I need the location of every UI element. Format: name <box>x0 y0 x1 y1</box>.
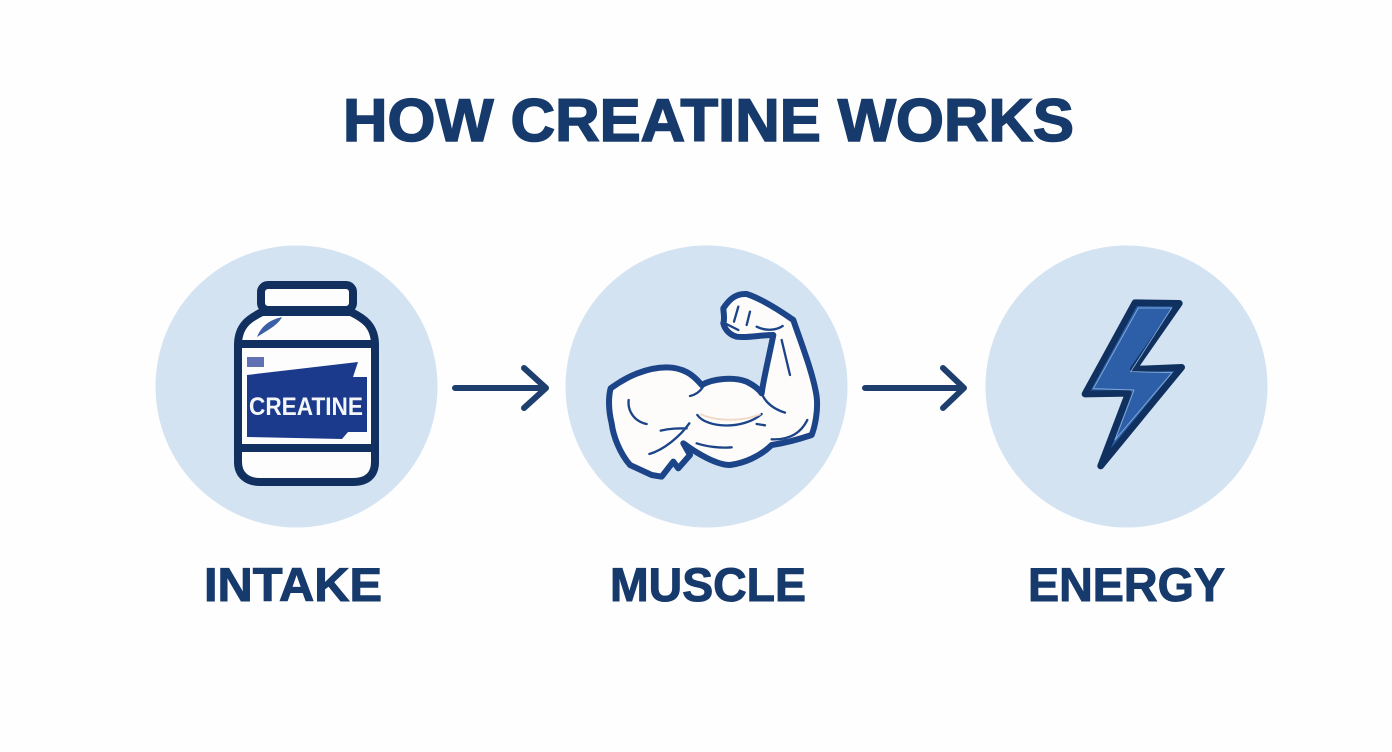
bottle label text: CREATINE <box>249 393 363 421</box>
icon: lightning bolt <box>1085 303 1182 466</box>
label panel <box>247 362 367 439</box>
muscle contour lines <box>629 307 807 454</box>
panel: intake <box>156 246 438 611</box>
arrow: intake to muscle <box>455 368 546 408</box>
arrow: muscle to energy <box>865 368 964 408</box>
bolt shape <box>1085 303 1182 466</box>
panel: muscle <box>566 246 848 611</box>
intake label: INTAKE <box>204 558 382 611</box>
muscle circle <box>566 246 848 528</box>
intake circle <box>156 246 438 528</box>
arm outline <box>609 294 817 477</box>
bottle cap <box>261 285 353 310</box>
small label swatch <box>247 357 264 367</box>
muscle shading <box>700 414 761 420</box>
icon: flexed arm <box>609 294 817 477</box>
panel: energy <box>986 246 1268 611</box>
highlight mark <box>257 317 282 337</box>
title: HOW CREATINE WORKS <box>343 87 1074 154</box>
bottle bands <box>238 344 375 448</box>
bottle body <box>238 312 375 482</box>
bolt inner highlight <box>1093 308 1172 440</box>
energy circle <box>986 246 1268 528</box>
icon: creatine bottle <box>238 285 375 482</box>
energy label: ENERGY <box>1028 558 1225 611</box>
muscle label: MUSCLE <box>610 558 806 611</box>
